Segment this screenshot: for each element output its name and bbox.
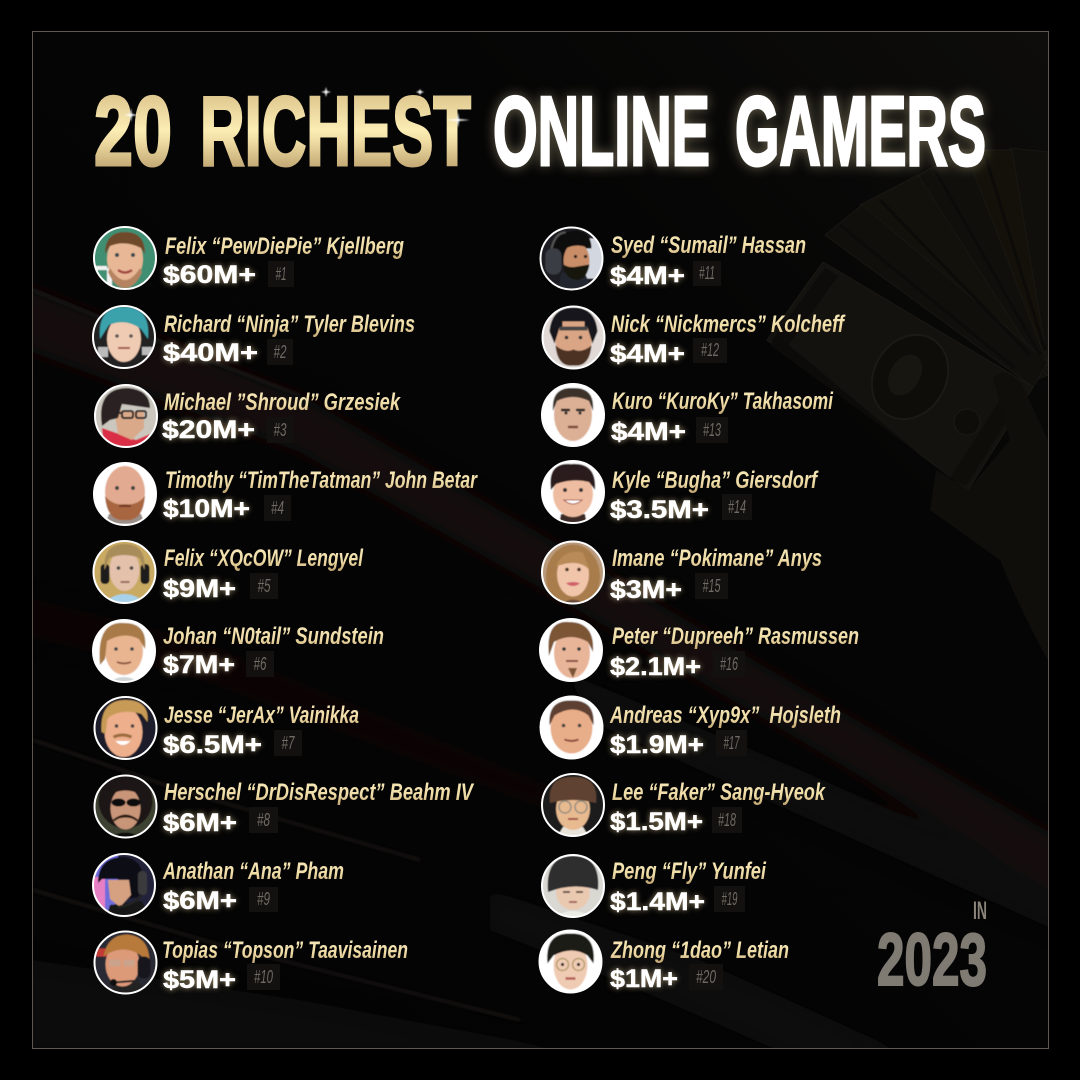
avatar [541,773,605,837]
rank badge: #8 [257,810,270,830]
avatar [541,540,605,608]
row 2: Ninja [92,305,415,369]
net worth: $1.5M+ [610,808,703,836]
rank badge: #3 [274,420,286,440]
title sparkles [124,87,470,128]
row 12: Nickmercs [542,306,846,370]
row 20: 1dao [538,930,789,994]
net worth: $9M+ [163,575,236,603]
rank badge [712,807,742,833]
rank badge: #5 [258,576,271,596]
rank badge [689,964,723,990]
rank badge: #9 [257,889,270,909]
net worth: $60M+ [163,261,256,289]
rank badge [268,261,294,287]
name: Lee “Faker” Sang-Hyeok [612,779,826,806]
name: Peng “Fly” Yunfei [612,858,767,885]
row 6: N0tail [92,619,384,683]
title: white words: ONLINE [493,76,710,186]
name: Johan “N0tail” Sundstein [163,623,384,650]
rank badge: #4 [271,498,284,518]
rank badge [695,573,728,599]
avatar [540,696,604,760]
rank badge [713,651,745,677]
avatar [93,226,157,292]
avatar [541,460,605,524]
net worth: $10M+ [163,495,250,523]
name: Herschel “DrDisRespect” Beahm IV [164,779,475,806]
avatar [542,306,606,370]
name: Felix “XQcOW” Lengyel [164,545,364,572]
row 11: Sumail [540,226,806,292]
row 1: PewDiePie [93,226,404,292]
rank badge [267,339,293,365]
net worth: $3M+ [610,576,682,604]
net worth: $3.5M+ [610,496,709,524]
background image: fan of banknotes held in a hand [767,148,1048,660]
rank badge: #11 [699,263,715,283]
avatar [94,772,158,840]
rank badge: #1 [276,264,286,284]
rank badge: #7 [282,733,295,753]
row 18: Faker [541,773,826,837]
net worth: $4M+ [611,418,686,446]
name: Zhong “1dao” Letian [610,937,789,964]
rank badge: #13 [703,420,721,440]
avatar [92,305,156,369]
rank badge [696,417,728,443]
row 19: Fly [541,854,767,920]
row 13: KuroKy [541,383,834,447]
name: Michael ”Shroud” Grzesiek [164,389,401,416]
avatar [94,696,158,760]
name: Andreas “Xyp9x” Hojsleth [609,702,841,729]
rank badge: #18 [718,810,736,830]
rank badge [249,807,278,833]
net worth: $7M+ [163,651,235,679]
rank badge [722,494,752,520]
net worth: $1.4M+ [610,888,705,916]
title: gold words: 20 [94,76,172,186]
rank badge [250,573,278,599]
rank badge: #17 [724,733,740,753]
row 7: JerAx [94,696,359,760]
avatar [94,930,158,996]
title: gold words: RICHEST [200,76,471,186]
net worth: $6.5M+ [163,731,262,759]
rank badge [274,730,302,756]
net worth: $40M+ [163,339,258,367]
name: Felix “PewDiePie” Kjellberg [165,233,404,260]
title [94,76,986,186]
name: Kuro “KuroKy” Takhasomi [612,388,834,415]
net worth: $20M+ [162,416,255,444]
avatar [538,930,602,994]
year label: 2023: 2023 [877,918,987,1001]
avatar [92,619,156,683]
net worth: $6M+ [163,809,237,837]
name: Timothy “TimTheTatman” John Betar [165,467,478,494]
row 4: TimTheTatman [93,462,478,526]
avatar [541,383,605,447]
rank badge: #16 [720,654,739,674]
row 9: Ana [92,853,344,919]
rank badge [249,887,278,912]
background silk streaks [0,275,1080,1060]
net worth: $6M+ [163,887,237,915]
row 10: Topson [94,930,408,996]
name: Syed “Sumail” Hassan [611,232,806,259]
rank badge [714,886,745,912]
name: Imane “Pokimane” Anys [612,545,822,572]
name: Topias “Topson” Taavisainen [162,937,408,964]
year label: IN: IN [973,897,987,925]
rank badge [264,495,291,521]
row 8: DrDisRespect [94,772,475,840]
title: gold words [94,76,471,186]
rank badge [246,651,274,677]
row 3: Shroud [94,384,401,450]
avatar [539,618,603,682]
net worth: $4M+ [610,340,685,368]
rank badge [693,338,727,363]
avatar [540,226,604,292]
net worth: $4M+ [610,262,685,290]
avatar [541,854,605,920]
rank badge [693,261,721,286]
rank badge: #19 [722,889,738,909]
avatar [94,384,158,450]
rank badge [247,964,280,990]
net worth: $1M+ [610,965,678,993]
rank badge [716,730,747,756]
row 17: Xyp9x [540,696,841,760]
rank badge [267,417,293,443]
rank badge: #15 [702,576,721,596]
avatar [92,540,156,604]
name: Peter “Dupreeh” Rasmussen [612,623,859,650]
name: Richard “Ninja” Tyler Blevins [164,311,415,338]
row 15: Pokimane [541,540,822,608]
row 16: Dupreeh [539,618,859,682]
row 5: XQcOW [92,540,364,604]
net worth: $2.1M+ [610,653,701,681]
name: Anathan “Ana” Pham [162,858,344,885]
rank badge: #20 [696,967,716,987]
row 14: Bugha [541,460,819,524]
avatar [92,853,156,919]
rank badge: #2 [274,342,286,362]
net worth: $5M+ [163,966,236,994]
net worth: $1.9M+ [610,731,704,759]
name: Kyle “Bugha” Giersdorf [612,467,819,494]
rank badge: #6 [254,654,267,674]
rank badge: #12 [701,340,719,360]
avatar [93,462,157,526]
rank badge: #14 [728,497,746,517]
name: Nick “Nickmercs” Kolcheff [611,311,846,338]
name: Jesse “JerAx” Vainikka [164,702,359,729]
rank badge: #10 [254,967,273,987]
